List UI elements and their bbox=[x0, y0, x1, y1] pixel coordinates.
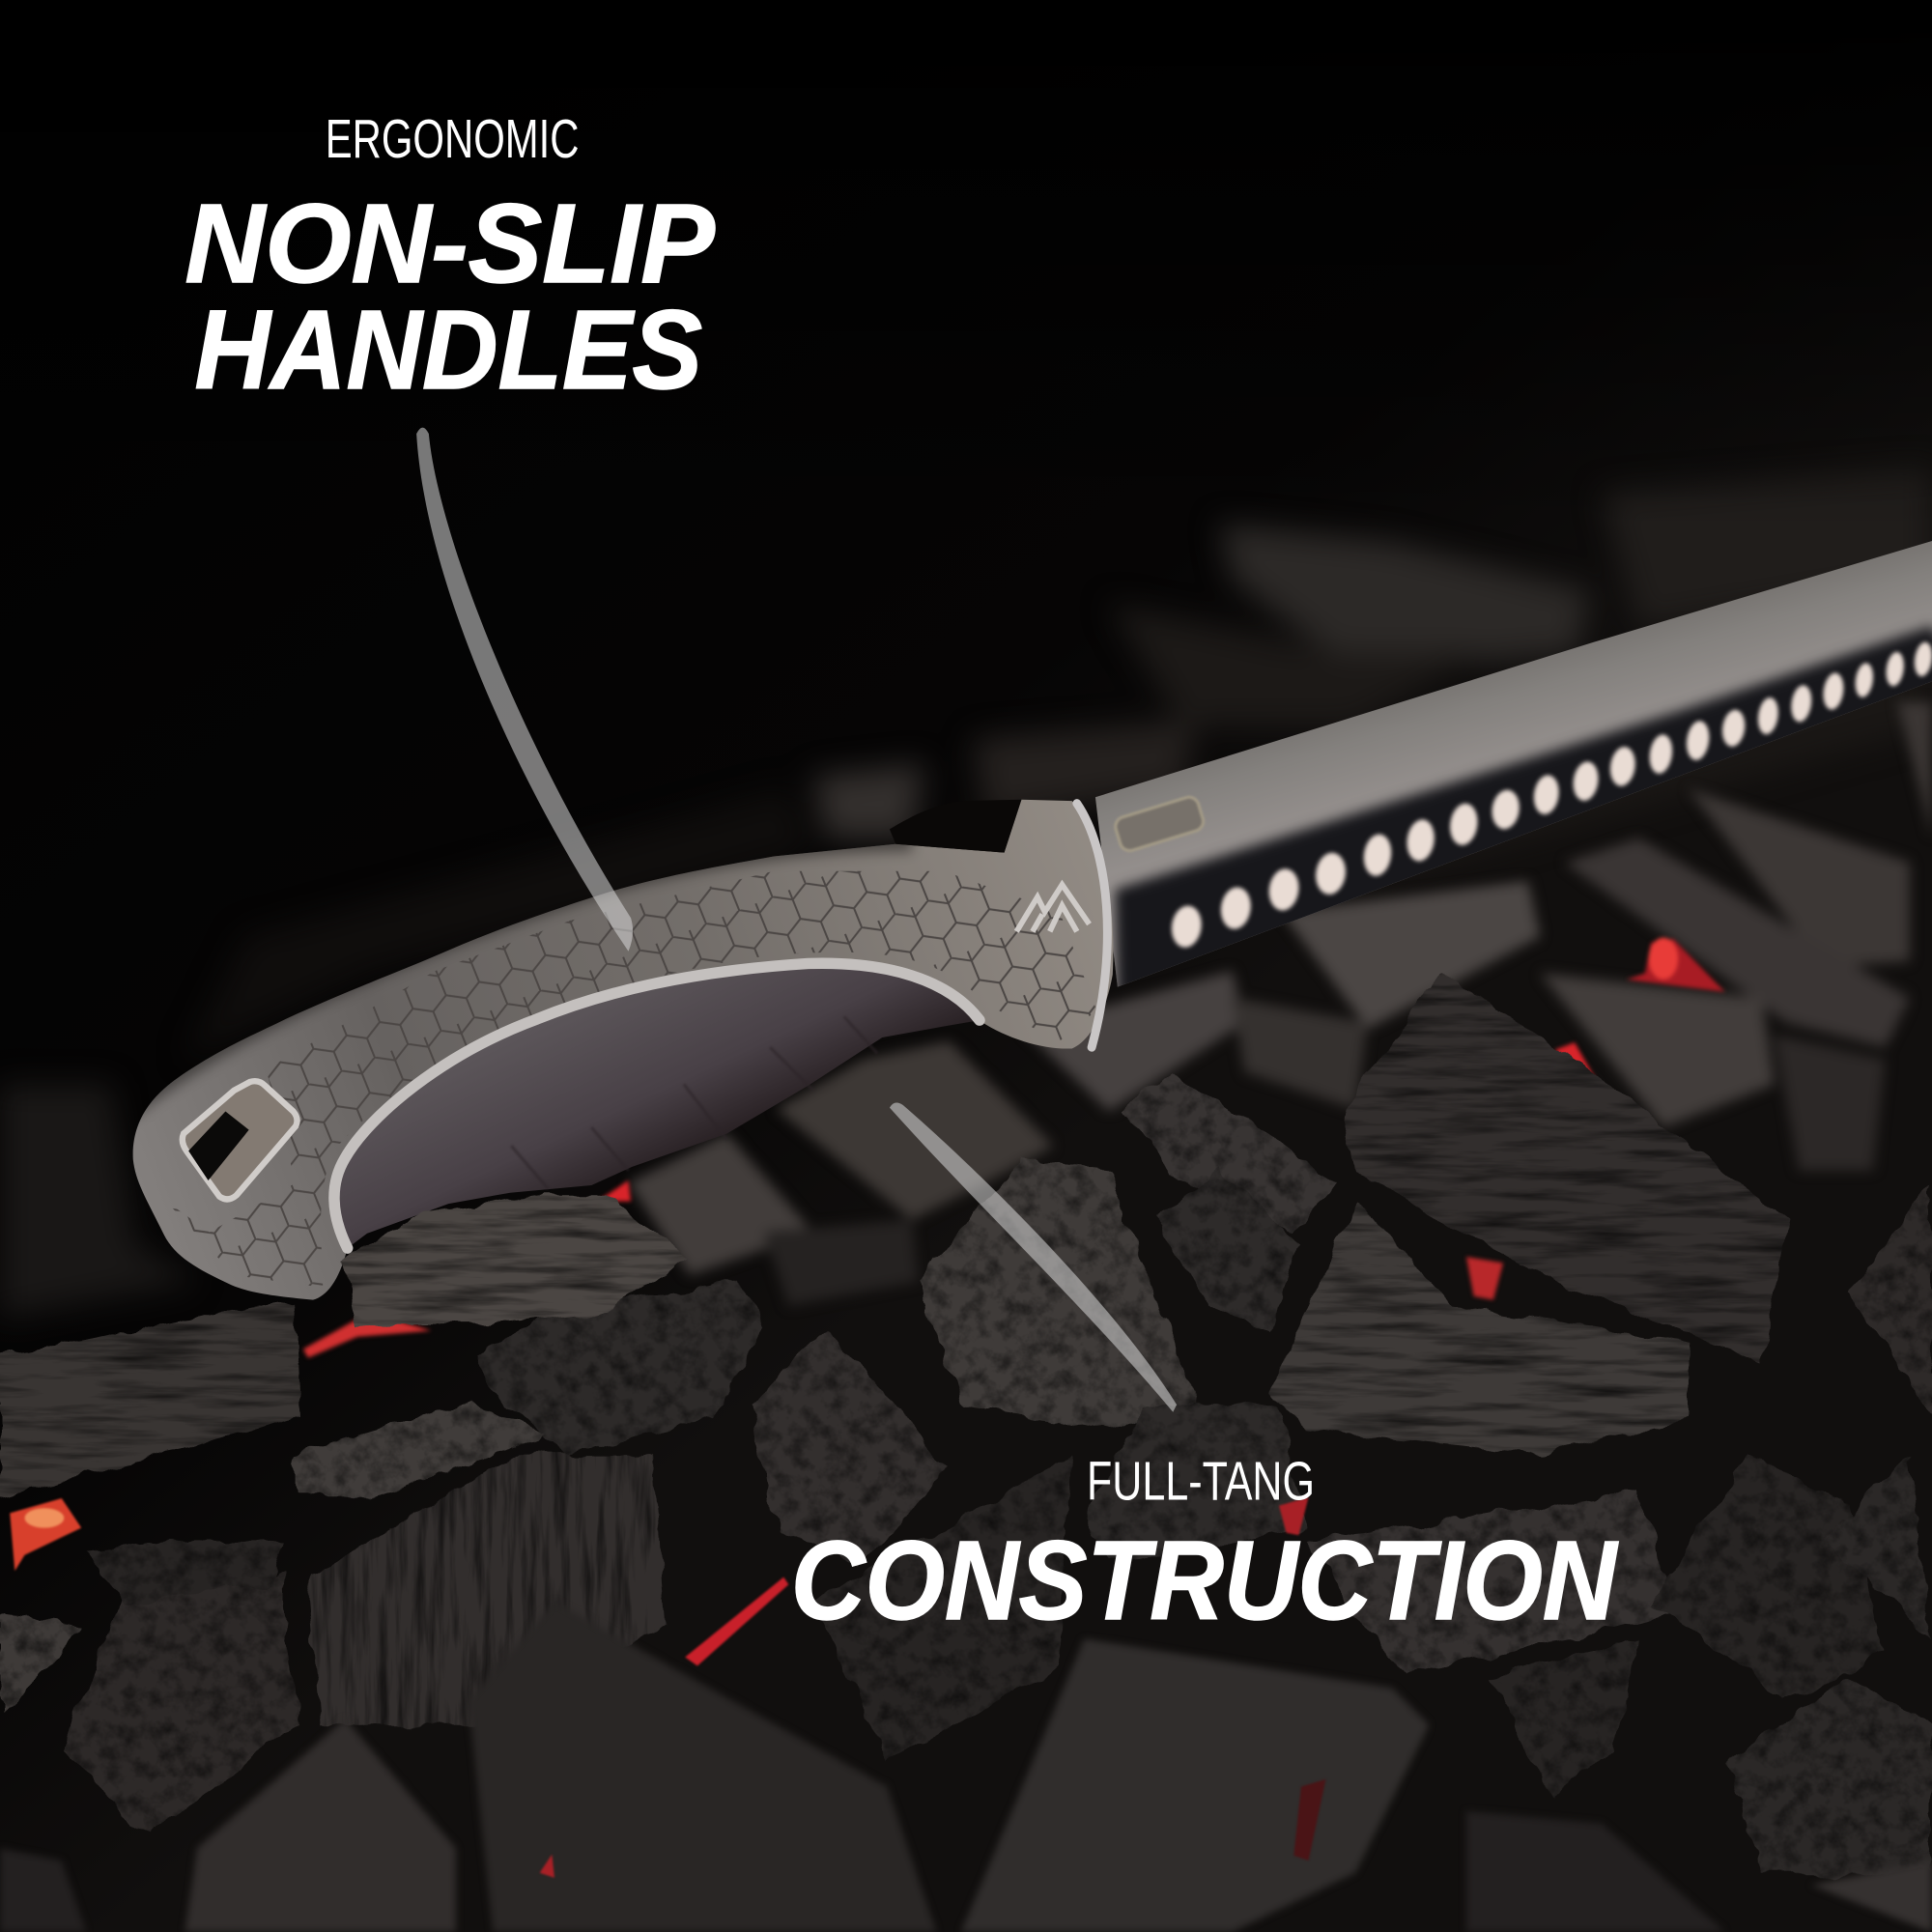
charcoal pile: vertical grain chunk bbox=[308, 1454, 666, 1725]
label: ergonomic non-slip handles bbox=[185, 108, 715, 412]
handle bbox=[124, 800, 1113, 1300]
charcoal pile: fine textured chunks bbox=[0, 1072, 1932, 1873]
callout line: construction bbox=[890, 1102, 1177, 1412]
label: full-tang construction bbox=[791, 1450, 1618, 1643]
charcoal pile: horizontal grain chunks bbox=[0, 974, 1786, 1497]
mountain logo bbox=[1016, 885, 1090, 931]
slot opening bbox=[188, 1112, 249, 1180]
hexagon texture bbox=[166, 871, 1096, 1288]
white inlay stripe bbox=[334, 963, 980, 1248]
grip ribs bbox=[511, 1016, 877, 1189]
heading: non-slip: NON-SLIP bbox=[185, 181, 715, 306]
blade shadow band bbox=[1115, 626, 1932, 1010]
handle top shading and texture bbox=[124, 838, 1096, 1288]
charcoal piece over handle bbox=[343, 1195, 690, 1324]
finger hole bbox=[890, 800, 1021, 853]
glowing embers bbox=[10, 1497, 1325, 1878]
knife bbox=[124, 541, 1932, 1300]
blurred rear charcoal bbox=[0, 469, 1932, 1319]
heading: handles: HANDLES bbox=[195, 287, 702, 412]
blade bbox=[1095, 541, 1932, 1010]
blade dimples bbox=[1169, 640, 1932, 950]
heading: construction: CONSTRUCTION bbox=[791, 1518, 1618, 1643]
guard edge stripe bbox=[1077, 804, 1107, 1047]
subheading: full-tang: FULL-TANG bbox=[1087, 1450, 1315, 1511]
lanyard slot bbox=[183, 1081, 298, 1199]
slot frame bbox=[183, 1081, 298, 1199]
ember glow: rear bbox=[303, 938, 1725, 1358]
midground charcoal bbox=[629, 702, 1932, 1306]
subheading: ergonomic: ERGONOMIC bbox=[326, 108, 579, 169]
darkening at the top of the scene bbox=[0, 0, 1932, 529]
rubber grip insert bbox=[334, 963, 980, 1248]
foreground charcoal bbox=[0, 1602, 1932, 1932]
blade body bbox=[1095, 541, 1932, 987]
top edge shadow bbox=[124, 838, 912, 1109]
blade logo plate bbox=[1113, 795, 1206, 853]
handle body bbox=[133, 800, 1113, 1300]
callout line: handles bbox=[416, 428, 633, 952]
